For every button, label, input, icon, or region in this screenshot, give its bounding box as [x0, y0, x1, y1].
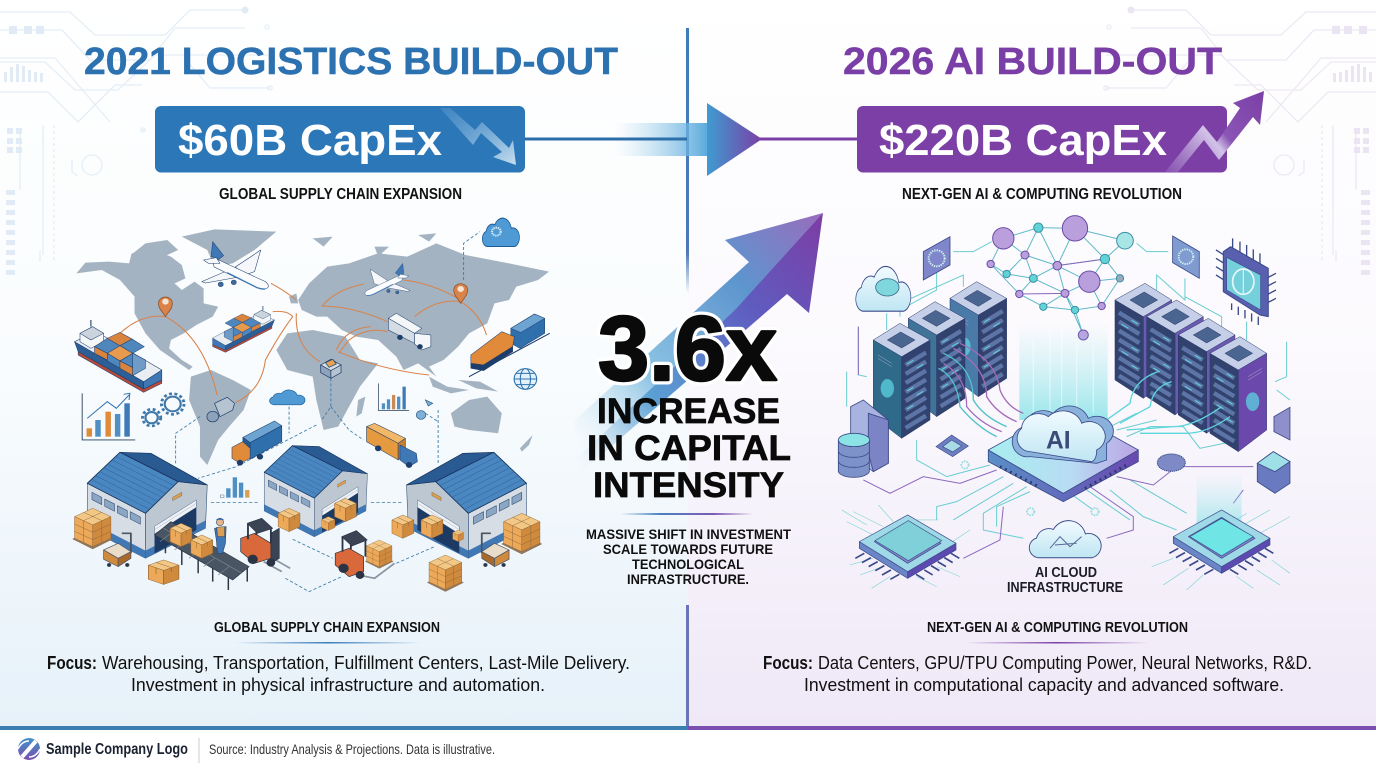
warehouse centre [264, 446, 367, 537]
stat description: TECHNOLOGICAL [632, 556, 744, 572]
AI cloud label [1007, 565, 1123, 596]
server racks right [1115, 283, 1267, 452]
database cylinder and server [838, 400, 888, 477]
bottom section right: heading: NEXT-GEN AI & COMPUTING REVOLUTION [927, 620, 1188, 636]
cargo plane small [365, 263, 410, 296]
AI processor [1216, 238, 1276, 325]
up arrow [1165, 91, 1264, 172]
subtitle right: NEXT-GEN AI & COMPUTING REVOLUTION [902, 186, 1182, 203]
pin traces [842, 505, 1290, 590]
stat description: MASSIVE SHIFT IN INVESTMENT [586, 526, 791, 542]
AI cloud label: AI CLOUD [1035, 565, 1097, 581]
pallet jack left [104, 533, 131, 567]
capex value: $220B CapEx [879, 116, 1168, 165]
bottom section right: focus text [763, 652, 1312, 695]
footer rule left [0, 726, 688, 730]
warehouse worker [215, 518, 226, 553]
AI cloud label: INFRASTRUCTURE [1007, 580, 1123, 596]
company name: Sample Company Logo [46, 741, 188, 758]
AI cloud: AI [1046, 427, 1071, 454]
source note: Source: Industry Analysis & Projections. Data is illustrative. [209, 741, 495, 757]
forklift one [241, 518, 290, 572]
dashed connectors [176, 232, 480, 592]
circuit pattern: top left [0, 6, 272, 275]
bottom section right: focus text: Investment in computational capacity and advanced software. [804, 674, 1284, 695]
bottom section left: focus text: Investment in physical infrastructure and automation. [131, 674, 545, 695]
small server box [1274, 407, 1290, 440]
chip bottom right [1169, 510, 1273, 574]
big diagonal growth arrow [575, 213, 823, 478]
stat label: INTENSITY [593, 466, 784, 505]
left panel background [0, 0, 688, 728]
warehouse left [87, 452, 207, 558]
mini chart between warehouses [220, 477, 249, 498]
chip bottom right die [1190, 518, 1253, 556]
icon tile right [1173, 236, 1199, 278]
truck orange [367, 423, 417, 468]
capex box: $220B [857, 91, 1264, 172]
pallet jack right [482, 533, 509, 567]
brain cloud icon [856, 266, 911, 311]
centre vertical divider, top [686, 28, 689, 293]
package box on map [321, 359, 341, 378]
stacked pallets [73, 498, 542, 592]
AI chip platform [988, 408, 1138, 502]
bottom section left: focus text: Warehousing, Transportation, Fulfillment Centers, Last-Mile Delivery. [102, 652, 630, 673]
bottom section right: rule [965, 642, 1149, 644]
title: 2021 logistics build-out: 2021 LOGISTICS BUILD-OUT [84, 41, 618, 83]
cloud gear icon [482, 218, 519, 246]
location pin America [159, 297, 172, 317]
shipping routes [120, 280, 486, 403]
capex value: $60B CapEx [178, 116, 443, 165]
connector arrow between CapEx boxes [525, 103, 858, 176]
headline stat: 3.6x: 3.6x [598, 298, 777, 400]
forklift two [335, 531, 395, 579]
cargo plane large [202, 242, 268, 289]
divider under stat [620, 513, 753, 515]
subtitle left: GLOBAL SUPPLY CHAIN EXPANSION [219, 186, 462, 203]
down arrow [440, 108, 516, 165]
light beam [1019, 323, 1108, 420]
bottom section left: focus text: Focus: [47, 652, 97, 673]
footer rule right [688, 726, 1376, 730]
package cluster South America [207, 397, 235, 422]
stat label: INCREASE [597, 392, 780, 431]
freight train [469, 314, 550, 377]
truck blue [232, 421, 282, 465]
truck white [388, 313, 431, 350]
centre vertical divider, bottom [686, 605, 689, 728]
icon tile left [923, 237, 950, 280]
bottom section left: focus text [47, 652, 630, 695]
small cube device [1257, 452, 1290, 493]
traces [847, 242, 1290, 538]
stat label: IN CAPITAL [587, 429, 791, 468]
warehouse right [407, 452, 526, 558]
bar chart with growth arrow [82, 393, 135, 440]
small chip left [936, 435, 968, 457]
conveyor belt [155, 522, 249, 590]
globe icon [514, 369, 537, 389]
neural network [987, 216, 1133, 340]
bottom section left: rule [236, 642, 420, 644]
chip bottom left die [875, 521, 942, 561]
bottom section right: focus text: Focus: [763, 652, 813, 673]
logistics illustration [73, 218, 550, 592]
headline stat: 3.6x: 3.6x [598, 298, 777, 400]
AI infrastructure illustration [838, 216, 1290, 590]
cloud bottom [1029, 521, 1101, 558]
stat description [586, 526, 791, 587]
small round chip [1157, 454, 1185, 471]
circuit pattern: top right [1104, 6, 1376, 275]
magnifier icon [416, 400, 433, 419]
bottom section left: heading: GLOBAL SUPPLY CHAIN EXPANSION [214, 620, 440, 636]
light beam over right chip [1197, 473, 1242, 537]
cloud upload icon [270, 390, 305, 405]
AI cloud [1012, 406, 1113, 463]
world map [76, 229, 549, 465]
stat description: INFRASTRUCTURE. [627, 571, 749, 587]
footer [0, 726, 1376, 768]
bottom section right: focus text: Data Centers, GPU/TPU Computing Power, Neural Networks, R&D. [818, 652, 1312, 673]
server racks left [873, 282, 1007, 438]
container ship small [213, 306, 275, 352]
location pin Asia [454, 284, 468, 303]
company logo mark [18, 738, 40, 760]
capex box: $60B [155, 106, 525, 172]
small chart [379, 383, 409, 411]
chip bottom left [855, 515, 959, 579]
container ship large [75, 320, 162, 392]
stat description: SCALE TOWARDS FUTURE [603, 541, 773, 557]
small gears [961, 461, 1099, 515]
stat label [587, 392, 791, 505]
gears [143, 394, 184, 426]
title: 2026 AI build-out: 2026 AI BUILD-OUT [843, 41, 1222, 83]
right panel background [688, 0, 1376, 728]
data cables [938, 343, 1230, 437]
